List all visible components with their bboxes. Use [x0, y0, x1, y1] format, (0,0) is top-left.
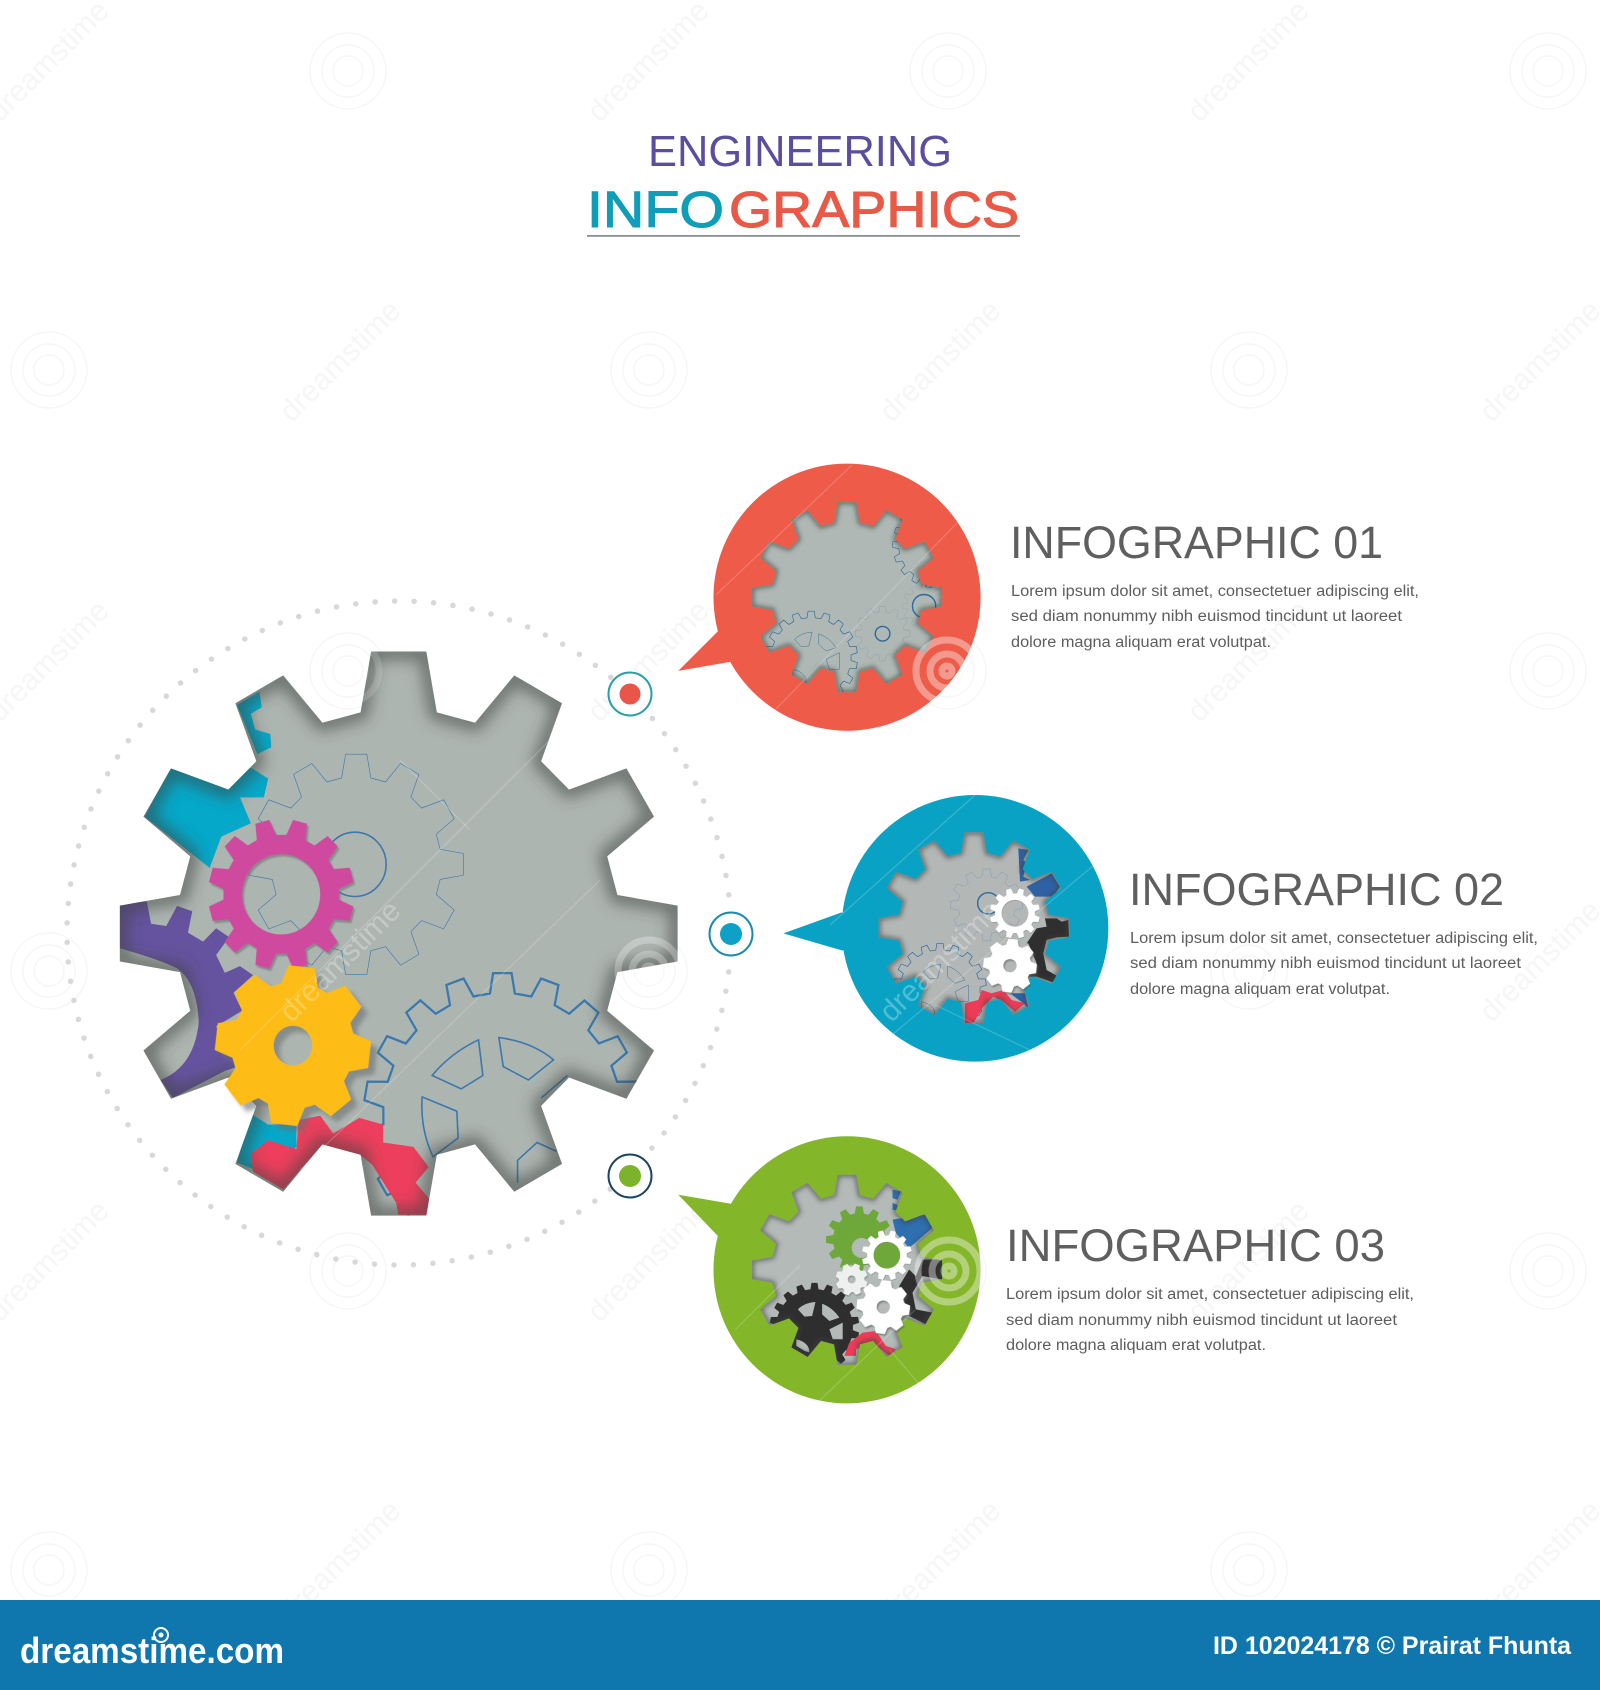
small gear base — [752, 502, 942, 692]
title: ENGINEERING — [648, 127, 952, 176]
title: INFO — [587, 181, 724, 238]
dark yellow cog edge — [227, 1074, 232, 1078]
text block: infographic 02: INFOGRAPHIC 02 — [1129, 864, 1504, 915]
background watermark pattern: dreamstime — [1181, 594, 1315, 728]
footer bar — [0, 1600, 1600, 1690]
background watermark pattern: dreamstime — [273, 1494, 407, 1628]
pink cog — [192, 802, 370, 986]
text block: infographic 01 — [1010, 517, 1419, 651]
text block: infographic 03 — [1006, 1220, 1414, 1354]
white cog lower — [854, 1278, 913, 1336]
text block: infographic 02: dolore magna aliquam erat volutpat. — [1130, 981, 1390, 998]
text block: infographic 01: dolore magna aliquam erat volutpat. — [1011, 634, 1271, 651]
red cog — [251, 1116, 429, 1215]
clipped inner cogs — [120, 651, 678, 1280]
background watermark pattern: dreamstime — [581, 594, 715, 728]
footer credit: ID 102024178 © Prairat Fhunta — [1213, 1632, 1572, 1660]
white cog lower — [980, 936, 1039, 995]
footer logo: dreamstime.com — [20, 1630, 284, 1671]
marker 1 — [608, 672, 652, 716]
cyan cog pieces — [145, 692, 296, 1174]
yellow cog — [207, 958, 378, 1134]
white cog small — [831, 1259, 872, 1300]
main cut-out gear with coloured cogs — [120, 652, 678, 1216]
marker 2 — [710, 912, 752, 956]
text block: infographic 01: Lorem ipsum dolor sit amet, consectetuer adipiscing elit, — [1011, 583, 1419, 600]
panel: green speech bubble — [678, 1136, 981, 1403]
bubble shape — [678, 464, 981, 731]
title: GRAPHICS — [729, 181, 1019, 238]
bubble shape — [783, 795, 1108, 1062]
background watermark pattern: dreamstime — [873, 294, 1007, 428]
white cog upper — [984, 883, 1046, 944]
title — [587, 127, 1020, 238]
text block: infographic 01: sed diam nonummy nibh euismod tincidunt ut laoreet — [1011, 608, 1403, 625]
inner shadow of cut-out — [120, 651, 678, 1216]
clipped cogs — [752, 1175, 942, 1379]
overlay watermarks on artwork — [240, 465, 1100, 1400]
outline gear upper — [249, 754, 463, 975]
overlay watermarks on artwork: dreamstime — [273, 894, 407, 1028]
small gear base — [752, 1175, 942, 1365]
dotted orbit circle — [67, 601, 731, 1265]
panel: red speech bubble — [678, 464, 981, 731]
bubble shape — [678, 1136, 981, 1403]
background watermark pattern: dreamstime — [273, 294, 407, 428]
clipped cogs — [879, 832, 1069, 1044]
outline gear lower — [363, 972, 637, 1216]
gear cut-out base — [120, 651, 678, 1216]
overlay watermarks on artwork: dreamstime — [873, 894, 1007, 1028]
text block: infographic 03: sed diam nonummy nibh euismod tincidunt ut laoreet — [1006, 1312, 1398, 1329]
panel: blue speech bubble — [783, 795, 1108, 1062]
text block: infographic 03: dolore magna aliquam erat volutpat. — [1006, 1337, 1266, 1354]
text block: infographic 03: INFOGRAPHIC 03 — [1006, 1220, 1385, 1271]
background watermark pattern: dreamstime — [873, 1494, 1007, 1628]
text block: infographic 01: INFOGRAPHIC 01 — [1010, 517, 1383, 568]
text block: infographic 02: sed diam nonummy nibh euismod tincidunt ut laoreet — [1130, 955, 1522, 972]
background watermark pattern: dreamstime — [1181, 1194, 1315, 1328]
marker 3 — [608, 1154, 652, 1198]
small gear base — [879, 832, 1069, 1023]
text block: infographic 02: Lorem ipsum dolor sit amet, consectetuer adipiscing elit, — [1130, 930, 1538, 947]
outline cogs — [752, 502, 942, 692]
text block: infographic 03: Lorem ipsum dolor sit amet, consectetuer adipiscing elit, — [1006, 1286, 1414, 1303]
purple cog — [120, 901, 253, 1098]
white cog upper — [856, 1225, 917, 1286]
background watermark pattern: dreamstime — [581, 1194, 715, 1328]
text block: infographic 02 — [1129, 864, 1538, 998]
